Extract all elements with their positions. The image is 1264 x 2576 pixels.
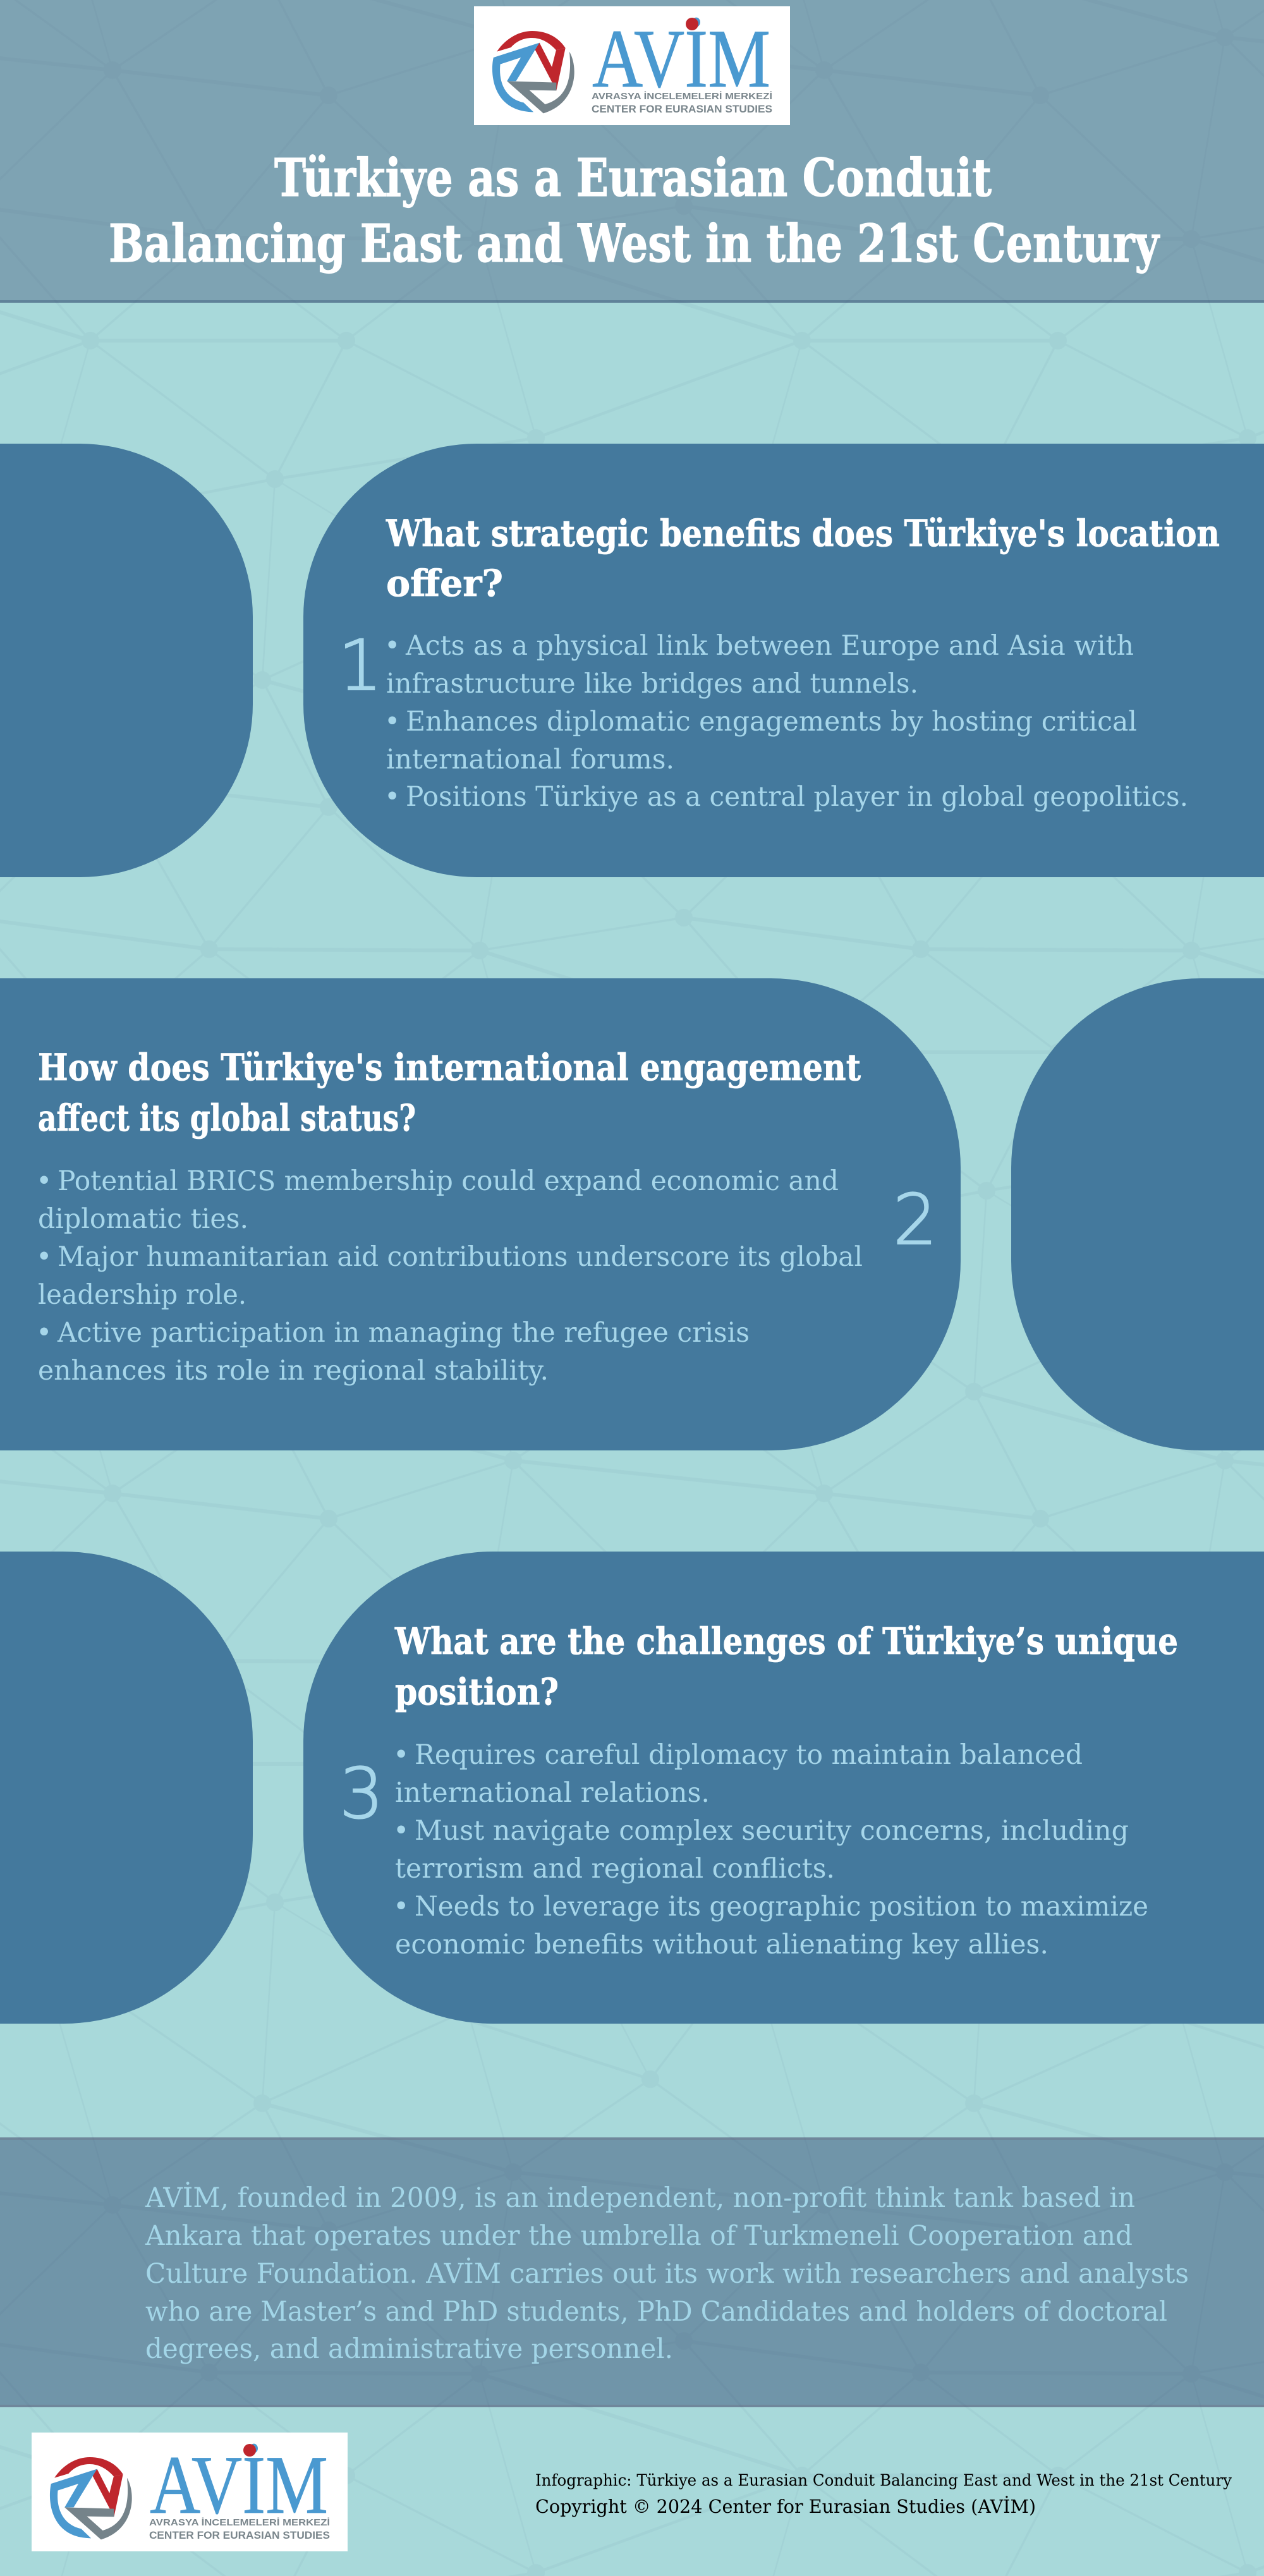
text: question 2 answer: • [36, 1241, 52, 1273]
text: question 1 answer: Enhances diplomatic engagements by hosting critical [406, 706, 1137, 738]
heading: question 2: How does Türkiye's international engagement [38, 1046, 861, 1089]
text: question 2 answer: • [36, 1317, 52, 1349]
text: question 1 answer: Acts as a physical link between Europe and Asia with [405, 630, 1134, 662]
text: question 1 answer: • [384, 630, 400, 662]
text: question 3 answer: • [393, 1891, 409, 1923]
panel: question 1 [303, 444, 1264, 877]
text: question 2 answer: Potential BRICS membership could expand economic and [58, 1165, 839, 1197]
logo: top: CENTER FOR EURASIAN STUDIES [592, 104, 772, 115]
text: footer credits: Infographic: Türkiye as a Eurasian Conduit Balancing East and West in the 21st Century [535, 2471, 1232, 2489]
text: footer credits [535, 2471, 1232, 2517]
heading: question 3 [394, 1620, 1178, 1713]
text: question 2 answer: Active participation in managing the refugee crisis [57, 1317, 750, 1349]
text: question 2 answer: enhances its role in regional stability. [38, 1355, 549, 1387]
text: question 1 answer: Positions Türkiye as a central player in global geopolitics. [406, 781, 1188, 813]
logo: footer: AVİM [150, 2438, 328, 2531]
text: question 2 answer: diplomatic ties. [38, 1203, 248, 1235]
text: question 3 answer: Needs to leverage its geographic position to maximize [415, 1891, 1148, 1923]
text: about AVİM: Culture Foundation. AVİM carries out its work with researchers and analysts [145, 2257, 1189, 2290]
text: question 1 answer: • [384, 706, 400, 738]
logo: top [474, 6, 790, 125]
title: Türkiye as a Eurasian Conduit [274, 148, 992, 209]
heading: question 2 [38, 1046, 861, 1139]
panel: question 3 [303, 1552, 1264, 2024]
about band [0, 2137, 1264, 2407]
heading: question 1 [386, 512, 1220, 605]
text: question 1 answer: • [384, 781, 400, 813]
logo: top: AVİM [592, 12, 770, 105]
heading: question 2: affect its global status? [38, 1097, 416, 1139]
logo: footer: AVRASYA İNCELEMELERİ MERKEZİ [149, 2517, 330, 2528]
text: about AVİM: Ankara that operates under the umbrella of Turkmeneli Cooperation and [145, 2220, 1133, 2252]
logo: footer: CENTER FOR EURASIAN STUDIES [149, 2530, 330, 2541]
logo: top: AVRASYA İNCELEMELERİ MERKEZİ [592, 91, 772, 102]
text: footer credits: Copyright © 2024 Center for Eurasian Studies (AVİM) [535, 2495, 1036, 2517]
text: about AVİM: AVİM, founded in 2009, is an independent, non-profit think tank based in [145, 2182, 1135, 2214]
text: question 2 answer [36, 1165, 863, 1387]
text: question 3 answer: terrorism and regional conflicts. [395, 1853, 835, 1885]
panel: left pill 1 [0, 444, 253, 877]
text: question 3 answer: economic benefits without alienating key allies. [395, 1929, 1048, 1960]
logo: footer [32, 2433, 348, 2551]
text: question 2 answer: Major humanitarian aid contributions underscore its global [58, 1241, 863, 1273]
heading: question 1: offer? [386, 562, 503, 605]
text: question 1 answer [384, 630, 1188, 813]
title [109, 148, 1160, 274]
number 3: 3 [339, 1753, 384, 1834]
text: question 1 answer: international forums. [386, 744, 674, 775]
text: question 3 answer: Requires careful diplomacy to maintain balanced [415, 1739, 1083, 1771]
text: question 3 answer: international relations. [395, 1777, 710, 1809]
header band [0, 0, 1264, 303]
text: question 3 answer [393, 1739, 1148, 1960]
text: question 2 answer: • [36, 1165, 52, 1197]
text: question 3 answer: • [393, 1815, 409, 1847]
text: about AVİM: degrees, and administrative personnel. [145, 2333, 673, 2365]
text: about AVİM [145, 2182, 1189, 2365]
heading: question 3: position? [395, 1670, 559, 1713]
text: question 1 answer: infrastructure like bridges and tunnels. [386, 668, 918, 700]
text: question 3 answer: • [393, 1739, 409, 1771]
panel: question 2 [0, 978, 961, 1450]
panel: right pill 2 [1011, 978, 1264, 1450]
number 1: 1 [338, 625, 382, 706]
panel: left pill 3 [0, 1552, 253, 2024]
text: question 2 answer: leadership role. [38, 1279, 246, 1311]
text: question 3 answer: Must navigate complex security concerns, including [415, 1815, 1129, 1847]
text: about AVİM: who are Master’s and PhD students, PhD Candidates and holders of doctoral [145, 2296, 1167, 2328]
number 2: 2 [893, 1179, 937, 1260]
